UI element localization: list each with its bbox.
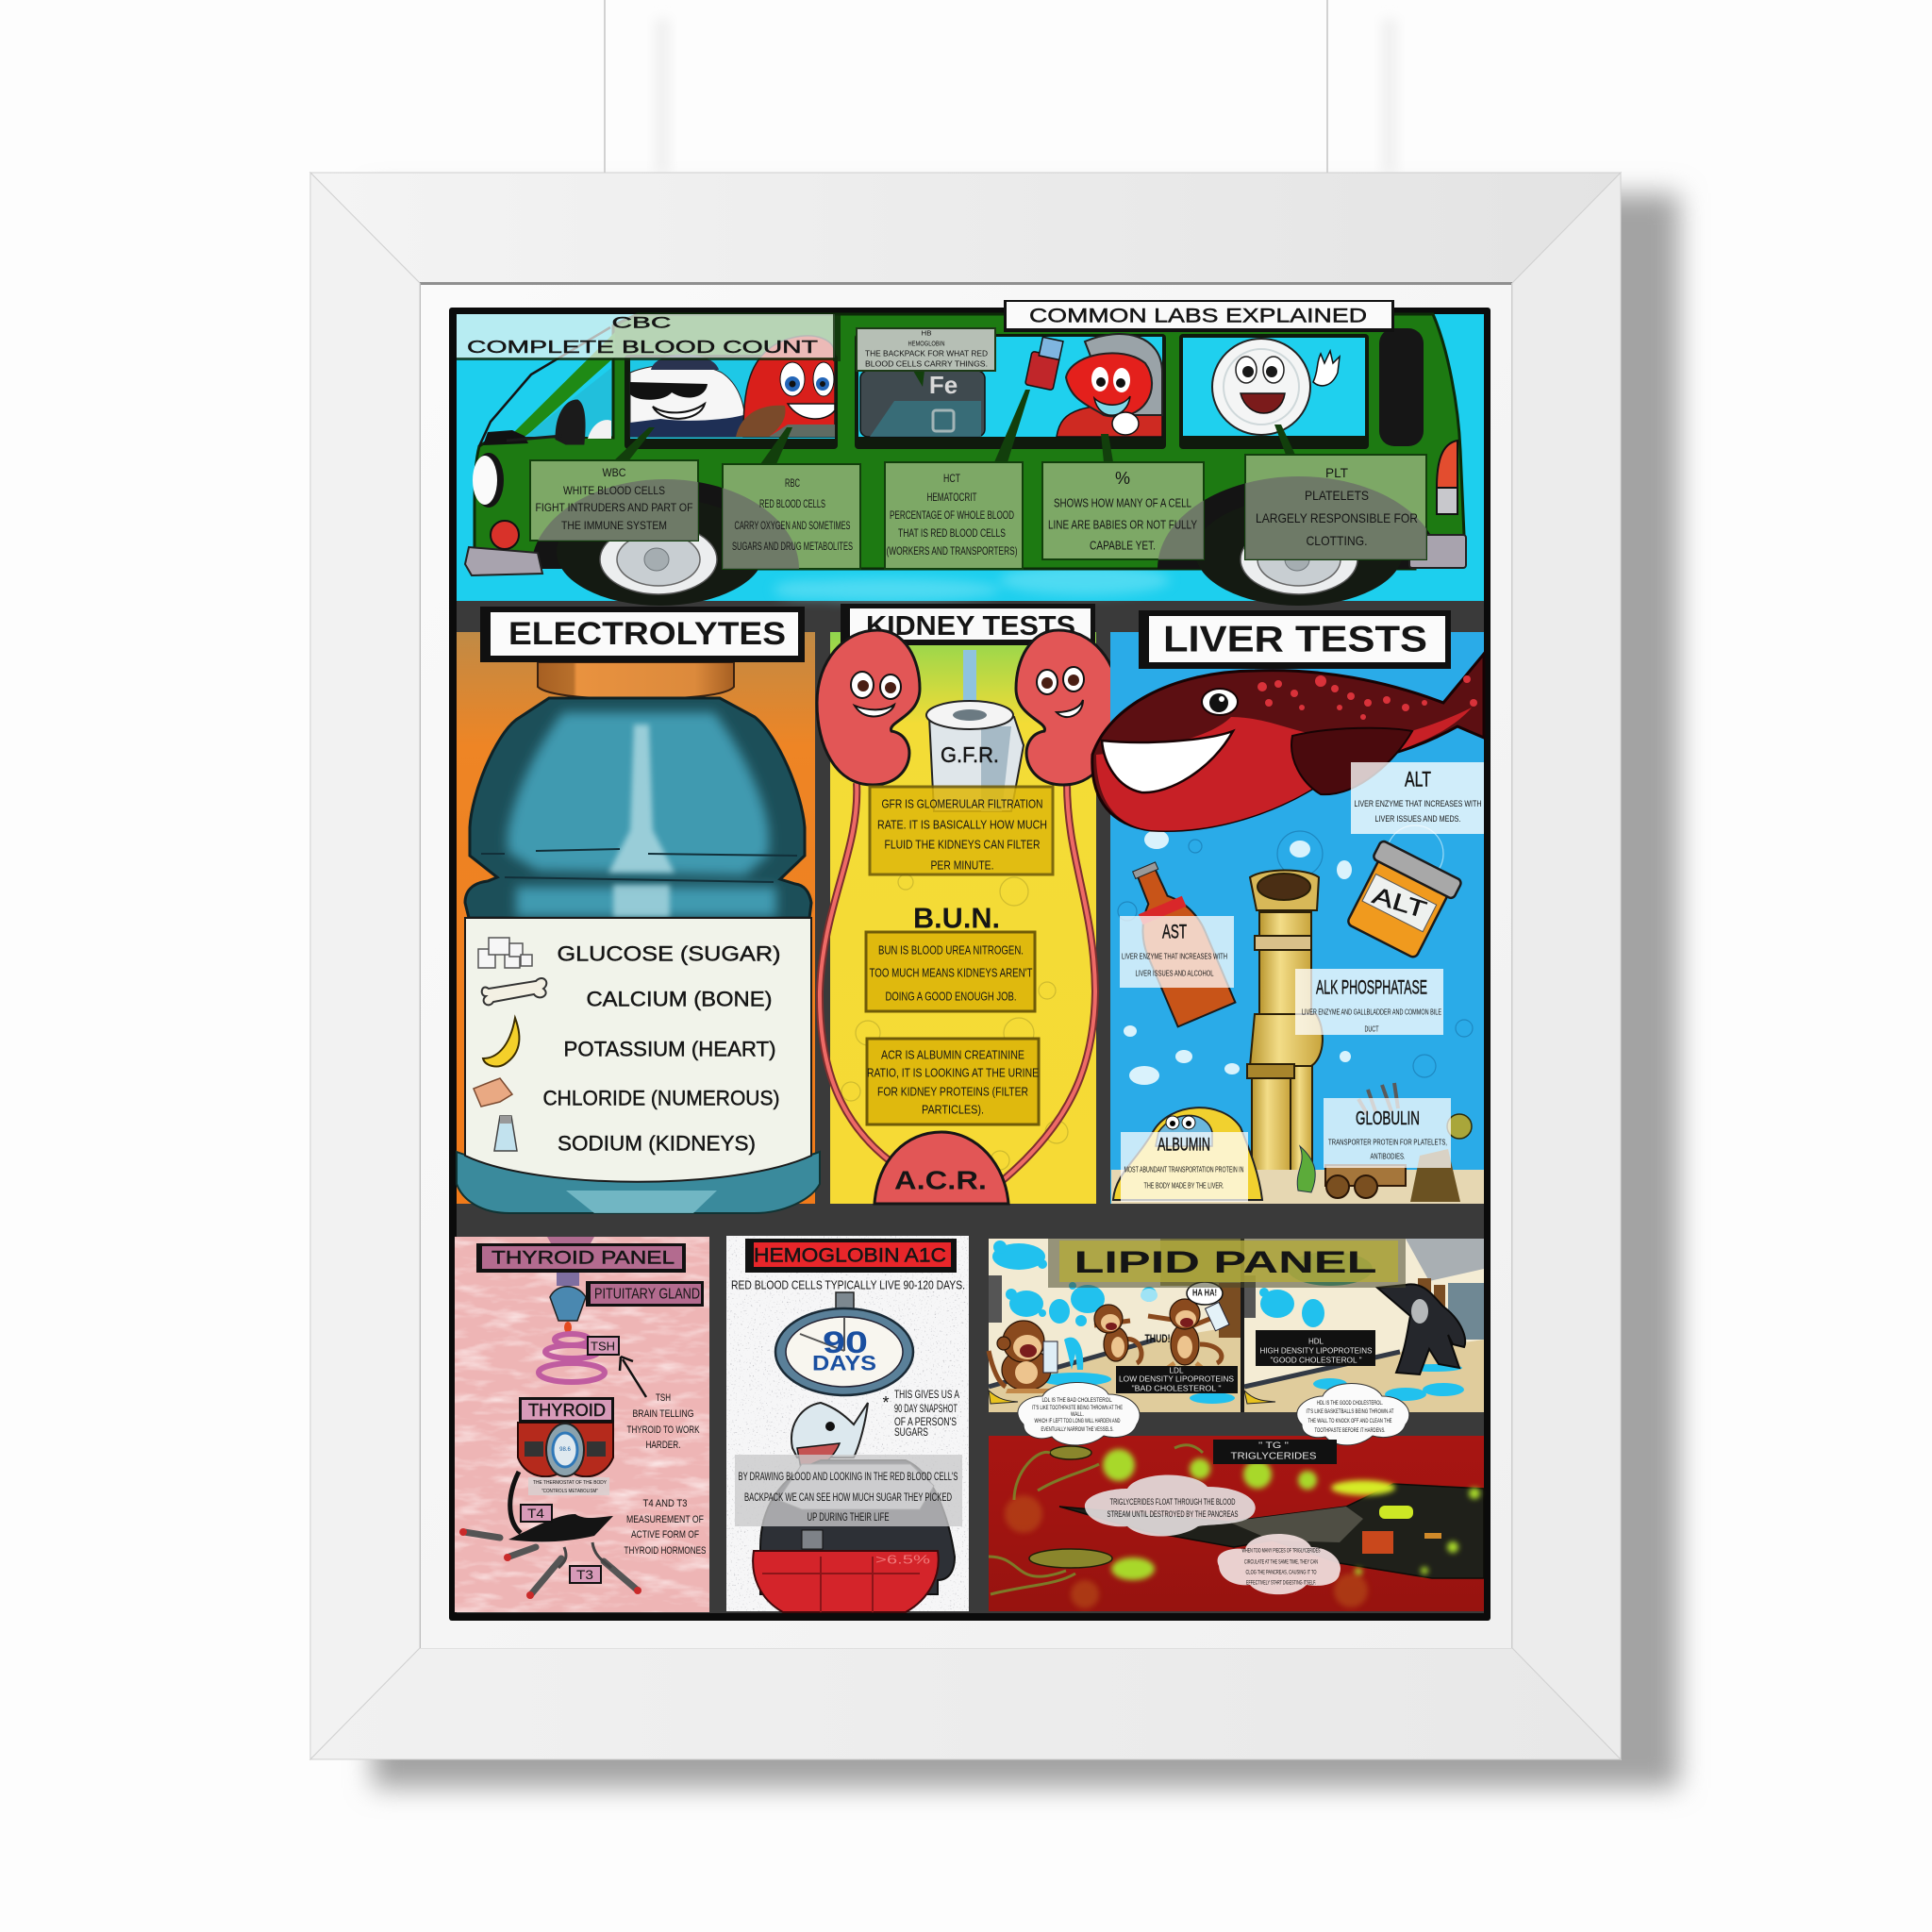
bubbles <box>841 874 1068 1170</box>
text: T4 and T3 explanation: T4 AND T3 <box>643 1498 687 1509</box>
text: T4 and T3 explanation: ACTIVE FORM OF <box>631 1529 699 1541</box>
cloud: pancreas warning: WHEN TOO MANY PIECES OF TRIGLYCERIDES <box>1241 1547 1321 1555</box>
glucose row <box>478 938 781 968</box>
callout: HCT <box>885 462 1023 569</box>
callout: HB hemoglobin: BLOOD CELLS CARRY THINGS. <box>865 360 988 368</box>
text: thermostat caption <box>528 1477 609 1495</box>
callout: HB hemoglobin: HB <box>921 330 932 338</box>
callout: RBC: RBC <box>785 476 800 490</box>
hallway scene right <box>1244 1239 1484 1412</box>
hanging wires <box>604 0 1397 175</box>
callout: HCT: PERCENTAGE OF WHOLE BLOOD <box>890 508 1014 522</box>
frame drop shadow <box>373 193 1679 1788</box>
callout: percent: CAPABLE YET. <box>1090 538 1156 553</box>
cloud: triglycerides float: STREAM UNTIL DESTROYED BY THE PANCREAS <box>1108 1509 1238 1519</box>
cloud: pancreas warning: EFFECTIVELY START DIGESTING ITSELF. <box>1246 1579 1316 1587</box>
side windows <box>625 328 1424 449</box>
icon: TSH signal rings <box>539 1334 605 1382</box>
callout: ALK phosphatase <box>1295 969 1443 1035</box>
callout: HB hemoglobin: HEMOGLOBIN <box>908 341 945 347</box>
character: red blood cell with bottle <box>1025 334 1162 437</box>
cloud: LDL explanation: IT'S LIKE TOOTHPASTE BEING THROWN AT THE <box>1032 1406 1123 1411</box>
character: right kidney <box>1016 630 1119 785</box>
icon: ALT pill bottle: ALT <box>1370 882 1429 924</box>
text: T4 and T3 explanation: THYROID HORMONES <box>625 1545 706 1557</box>
callout: HCT: (WORKERS AND TRANSPORTERS) <box>887 544 1017 558</box>
icon: 90 days stopwatch: DAYS <box>812 1351 876 1375</box>
label: triglycerides: TRIGLYCERIDES <box>1230 1451 1317 1462</box>
sound effect: thud: THUD! <box>1145 1332 1170 1345</box>
bumpers and lights <box>465 441 1466 575</box>
icon: ALT pill bottle <box>1341 840 1462 961</box>
label: T3 <box>570 1566 601 1583</box>
icon: 90 days stopwatch <box>775 1292 913 1395</box>
blue water background <box>1110 632 1484 1204</box>
pink background <box>455 1237 709 1612</box>
cloud: LDL explanation: EVENTUALLY NARROW THE VESSELS. <box>1041 1427 1114 1433</box>
callout: ACR: FOR KIDNEY PROTEINS (FILTER <box>877 1085 1028 1098</box>
mirror <box>507 401 584 443</box>
label: thyroid <box>519 1397 614 1423</box>
callout: ALK phosphatase: LIVER ENZYME AND GALLBLADDER AND COMMON BILE <box>1302 1008 1441 1017</box>
callout: WBC: WBC <box>602 466 626 479</box>
callout: BUN: DOING A GOOD ENOUGH JOB. <box>885 989 1017 1004</box>
callout: 90 day snapshot: THIS GIVES US A <box>894 1388 959 1401</box>
list: electrolytes <box>474 938 781 1155</box>
bottle label <box>465 918 811 1182</box>
callout: GFR: FLUID THE KIDNEYS CAN FILTER <box>885 838 1040 851</box>
cloud: HDL explanation <box>1297 1383 1409 1445</box>
callout: GFR <box>870 787 1053 874</box>
seaweed <box>1297 1146 1315 1192</box>
icon: backpack <box>753 1460 955 1612</box>
yellow background <box>830 632 1096 1204</box>
panel: thyroid panel <box>455 1237 709 1612</box>
windshield pillar and outline <box>479 327 615 446</box>
icon: shark sugar <box>791 1403 868 1474</box>
title: hemoglobin A1C: HEMOGLOBIN A1C <box>754 1245 946 1266</box>
panel: liver tests <box>1092 610 1484 1204</box>
cloud: HDL explanation: THE WALL TO KNOCK OFF AND CLEAN THE <box>1307 1419 1392 1424</box>
character: left kidney <box>817 630 920 785</box>
callout: ALT: ALT <box>1405 768 1431 791</box>
label: HDL: HDL <box>1308 1338 1324 1345</box>
callout: ALK phosphatase: DUCT <box>1364 1024 1379 1034</box>
callout: sugar explanation: BY DRAWING BLOOD AND LOOKING IN THE RED BLOOD CELL'S <box>738 1470 958 1483</box>
callout: AST: LIVER ENZYME THAT INCREASES WITH <box>1122 953 1227 960</box>
callout: RBC: SUGARS AND DRUG METABOLITES <box>732 540 853 553</box>
title: liver tests: LIVER TESTS <box>1163 619 1427 660</box>
cloud: pancreas warning <box>1218 1534 1341 1594</box>
label: HDL: "GOOD CHOLESTEROL " <box>1270 1357 1362 1364</box>
icon: toothpaste tubes <box>1043 1289 1229 1373</box>
cloud: LDL explanation: WALL. <box>1071 1412 1084 1418</box>
glucose row: GLUCOSE (SUGAR) <box>557 941 781 966</box>
icon: albumin car <box>1113 1108 1262 1200</box>
callout: globulin: ANTIBODIES. <box>1370 1153 1406 1160</box>
label: TSH <box>588 1337 619 1355</box>
character: hemoglobin backpack: Fe <box>929 371 958 399</box>
icon: stingray and missiles <box>459 1472 641 1599</box>
text: TSH explanation: THYROID TO WORK <box>626 1424 700 1436</box>
callout: HB hemoglobin <box>857 328 995 371</box>
callout: globulin: GLOBULIN <box>1356 1108 1420 1129</box>
callout: percent: SHOWS HOW MANY OF A CELL <box>1054 496 1191 509</box>
callout: 90 day snapshot <box>882 1388 959 1439</box>
icon: thyroid thermostat <box>518 1423 613 1476</box>
van body <box>475 314 1464 569</box>
green energy blobs <box>1103 1449 1480 1580</box>
blood vessel scene <box>989 1436 1484 1611</box>
text: T4 and T3 explanation: MEASUREMENT OF <box>626 1514 704 1525</box>
text: TSH explanation: BRAIN TELLING <box>632 1408 694 1420</box>
callout: BUN: TOO MUCH MEANS KIDNEYS AREN'T <box>870 966 1033 979</box>
callout: ACR <box>867 1039 1039 1124</box>
icon: bladder A.C.R.: A.C.R. <box>894 1166 987 1194</box>
callout: sugar explanation <box>735 1455 962 1526</box>
icon: 90 days stopwatch: 90 <box>823 1325 868 1359</box>
label: pituitary gland <box>586 1281 704 1307</box>
panel: lipid panel <box>989 1239 1484 1611</box>
callout: ALT: LIVER ENZYME THAT INCREASES WITH <box>1355 799 1481 808</box>
icon: bladder A.C.R. <box>874 1132 1008 1204</box>
callout: percent <box>1041 461 1205 560</box>
label: LDL: LOW DENSITY LIPOPROTEINS <box>1119 1375 1234 1383</box>
title: common labs explained: COMMON LABS EXPLAINED <box>1029 306 1367 326</box>
panel: CBC van <box>457 300 1484 606</box>
callout: albumin <box>1121 1132 1248 1202</box>
title: kidney tests: KIDNEY TESTS <box>866 611 1075 641</box>
callout: GFR: PER MINUTE. <box>930 858 994 872</box>
callout: RBC: CARRY OXYGEN AND SOMETIMES <box>734 519 851 532</box>
heading: B.U.N.: B.U.N. <box>913 902 1000 934</box>
callout: albumin: ALBUMIN <box>1158 1136 1210 1155</box>
icon: monkeys <box>989 1299 1222 1393</box>
white background <box>726 1236 969 1611</box>
header: CBC complete blood count: CBC <box>611 313 672 332</box>
sports drink bottle <box>457 662 820 1213</box>
cloud: pancreas warning: CIRCULATE AT THE SAME TIME, THEY CAN <box>1244 1558 1318 1566</box>
callout: HCT: HCT <box>943 472 960 485</box>
callout: albumin: MOST ABUNDANT TRANSPORTATION PROTEIN IN <box>1124 1166 1244 1174</box>
sand floor <box>1111 1170 1484 1204</box>
label: triglycerides <box>1213 1440 1337 1464</box>
calcium row: CALCIUM (BONE) <box>587 987 772 1011</box>
label: LDL: LDL <box>1170 1366 1184 1375</box>
icon: GFR cup <box>926 650 1024 811</box>
callout: PLT: LARGELY RESPONSIBLE FOR <box>1256 510 1418 525</box>
title: common labs explained <box>1004 300 1394 332</box>
icon: AST alcohol bottle <box>1115 855 1235 1026</box>
sky background <box>457 314 1484 601</box>
callout: BUN <box>866 932 1035 1011</box>
character: whale shark <box>1092 654 1484 830</box>
cloud: triglycerides float: TRIGLYCERIDES FLOAT THROUGH THE BLOOD <box>1109 1497 1236 1507</box>
calcium row <box>482 978 772 1011</box>
callout: ALK phosphatase: ALK PHOSPHATASE <box>1316 977 1427 998</box>
callout: globulin <box>1324 1098 1451 1168</box>
callout: 90 day snapshot: * <box>882 1393 890 1412</box>
callout: WBC: FIGHT INTRUDERS AND PART OF <box>536 501 692 514</box>
callout: sugar explanation: UP DURING THEIR LIFE <box>808 1510 889 1524</box>
title: liver tests <box>1139 610 1451 669</box>
character: platelet <box>1212 339 1340 435</box>
callout: ALT <box>1351 762 1484 834</box>
text: TSH explanation <box>626 1392 700 1451</box>
cloud: triglycerides float <box>1085 1474 1256 1536</box>
header: CBC complete blood count <box>457 313 841 361</box>
callout: RBC <box>722 463 861 570</box>
title: lipid panel: LIPID PANEL <box>1074 1245 1377 1279</box>
character: hemoglobin backpack <box>860 371 985 437</box>
sodium row <box>494 1116 756 1155</box>
label: triglycerides: " TG " <box>1258 1441 1289 1450</box>
callout: PLT: PLT <box>1325 465 1348 480</box>
callout: WBC <box>529 459 699 541</box>
icon: gorilla <box>1377 1284 1465 1374</box>
character: red blood cell driver <box>736 336 835 437</box>
cloud: HDL explanation: HDL IS THE GOOD CHOLESTEROL. <box>1317 1401 1383 1407</box>
callout: ACR: ACR IS ALBUMIN CREATININE <box>881 1047 1024 1062</box>
icon: pituitary tower <box>547 1237 594 1333</box>
speech: HA HA: HA HA! <box>1192 1289 1217 1298</box>
text: thermostat caption: THE THERMOSTAT OF THE BODY <box>533 1480 608 1486</box>
cloud: LDL explanation: WHICH IF LEFT TOO LONG WILL HARDEN AND <box>1034 1419 1121 1424</box>
icon: backpack: >6.5% <box>875 1553 931 1566</box>
cloud: pancreas warning: CLOG THE PANCREAS, CAUSING IT TO <box>1245 1570 1317 1575</box>
cloud: LDL explanation <box>1018 1382 1140 1445</box>
label: pituitary gland: PITUITARY GLAND <box>594 1287 700 1302</box>
panel: hemoglobin A1C <box>726 1236 969 1612</box>
label: T4: T4 <box>527 1506 544 1521</box>
title: hemoglobin A1C <box>745 1239 957 1273</box>
poster artwork <box>449 300 1491 1621</box>
alien parasites <box>1029 1446 1112 1568</box>
callout: WBC: THE IMMUNE SYSTEM <box>561 519 667 532</box>
callout: BUN: BUN IS BLOOD UREA NITROGEN. <box>878 943 1024 957</box>
speech: HA HA <box>1187 1282 1223 1305</box>
icon: goblin and cart <box>1325 1083 1472 1202</box>
text: T4 and T3 explanation <box>625 1498 706 1557</box>
callout: 90 day snapshot: SUGARS <box>894 1425 928 1439</box>
callout: ACR: RATIO, IT IS LOOKING AT THE URINE <box>867 1066 1039 1079</box>
label: HDL: HIGH DENSITY LIPOPROTEINS <box>1260 1347 1372 1355</box>
wheel arches and tires <box>531 476 1441 606</box>
cloud: HDL explanation: IT'S LIKE BASKETBALLS BEING THROWN AT <box>1306 1409 1394 1415</box>
label: LDL: "BAD CHOLESTEROL " <box>1132 1385 1222 1392</box>
title: electrolytes <box>480 607 805 662</box>
callout connector tails <box>613 371 1295 464</box>
chloride row <box>474 1078 779 1109</box>
panel: electrolytes <box>457 607 820 1213</box>
title: thyroid panel: THYROID PANEL <box>491 1249 675 1268</box>
label: T4 <box>521 1505 552 1522</box>
callout: GFR: GFR IS GLOMERULAR FILTRATION <box>881 796 1043 811</box>
callout: ALT: LIVER ISSUES AND MEDS. <box>1375 814 1460 824</box>
icon: thyroid thermostat: 98.6 <box>559 1447 571 1453</box>
text: lifespan: RED BLOOD CELLS TYPICALLY LIVE 90-120 DAYS. <box>731 1277 965 1292</box>
callout: GFR: RATE. IT IS BASICALLY HOW MUCH <box>877 817 1047 832</box>
bubbles <box>1124 830 1352 1085</box>
title: thyroid panel <box>476 1243 686 1273</box>
label: TSH: TSH <box>591 1340 615 1353</box>
dark spaceship <box>1059 1484 1484 1578</box>
sodium row: SODIUM (KIDNEYS) <box>558 1132 756 1155</box>
text: TSH explanation: HARDER. <box>645 1440 681 1451</box>
potassium row <box>483 1018 775 1066</box>
callout: PLT <box>1244 454 1427 560</box>
picture frame <box>310 173 1621 1759</box>
callout: albumin: THE BODY MADE BY THE LIVER. <box>1143 1181 1224 1191</box>
callout: HCT: THAT IS RED BLOOD CELLS <box>898 526 1006 540</box>
callout: HB hemoglobin: THE BACKPACK FOR WHAT RED <box>865 349 988 358</box>
potassium row: POTASSIUM (HEART) <box>564 1038 775 1060</box>
ureter tubes <box>820 783 1095 1181</box>
label: LDL <box>1116 1366 1238 1393</box>
header: CBC complete blood count: COMPLETE BLOOD COUNT <box>467 338 818 357</box>
arrow: TSH <box>620 1357 646 1397</box>
callout: PLT: PLATELETS <box>1305 488 1369 503</box>
icon: brass pipe <box>1247 870 1323 1199</box>
icon: GFR cup: G.F.R. <box>941 742 999 767</box>
callout: RBC: RED BLOOD CELLS <box>759 497 825 510</box>
callout: sugar explanation: BACKPACK WE CAN SEE HOW MUCH SUGAR THEY PICKED <box>744 1491 952 1504</box>
text: TSH explanation: TSH <box>656 1392 671 1404</box>
callout: 90 day snapshot: 90 DAY SNAPSHOT <box>894 1402 958 1415</box>
cloud: LDL explanation: LDL IS THE BAD CHOLESTEROL. <box>1041 1398 1113 1404</box>
callout: ACR: PARTICLES). <box>922 1102 984 1117</box>
title: kidney tests <box>841 604 1095 645</box>
callout: AST: LIVER ISSUES AND ALCOHOL <box>1136 970 1214 977</box>
callout: AST: AST <box>1162 921 1187 943</box>
chloride row: CHLORIDE (NUMEROUS) <box>543 1087 779 1109</box>
cloud: HDL explanation: TOOTHPASTE BEFORE IT HARDENS. <box>1315 1428 1386 1434</box>
callout: PLT: CLOTTING. <box>1306 533 1368 548</box>
text: thermostat caption: "CONTROLS METABOLISM" <box>541 1489 598 1494</box>
label: T3: T3 <box>576 1567 593 1582</box>
title: electrolytes: ELECTROLYTES <box>508 616 786 652</box>
callout: HCT: HEMATOCRIT <box>926 491 977 504</box>
callout: globulin: TRANSPORTER PROTEIN FOR PLATELETS, <box>1328 1138 1447 1147</box>
callout: WBC: WHITE BLOOD CELLS <box>563 484 665 497</box>
character: white blood cell <box>630 355 745 437</box>
callout: percent: LINE ARE BABIES OR NOT FULLY <box>1048 517 1197 532</box>
callout: percent: % <box>1115 469 1130 488</box>
title: lipid panel <box>1048 1239 1406 1288</box>
label: thyroid: THYROID <box>528 1401 606 1420</box>
hallway scene left <box>989 1239 1241 1412</box>
orange background <box>457 632 815 1204</box>
callout: 90 day snapshot: OF A PERSON'S <box>894 1415 957 1428</box>
label: HDL <box>1256 1330 1375 1366</box>
callout: AST <box>1120 916 1234 988</box>
panel: kidney tests <box>817 604 1119 1204</box>
